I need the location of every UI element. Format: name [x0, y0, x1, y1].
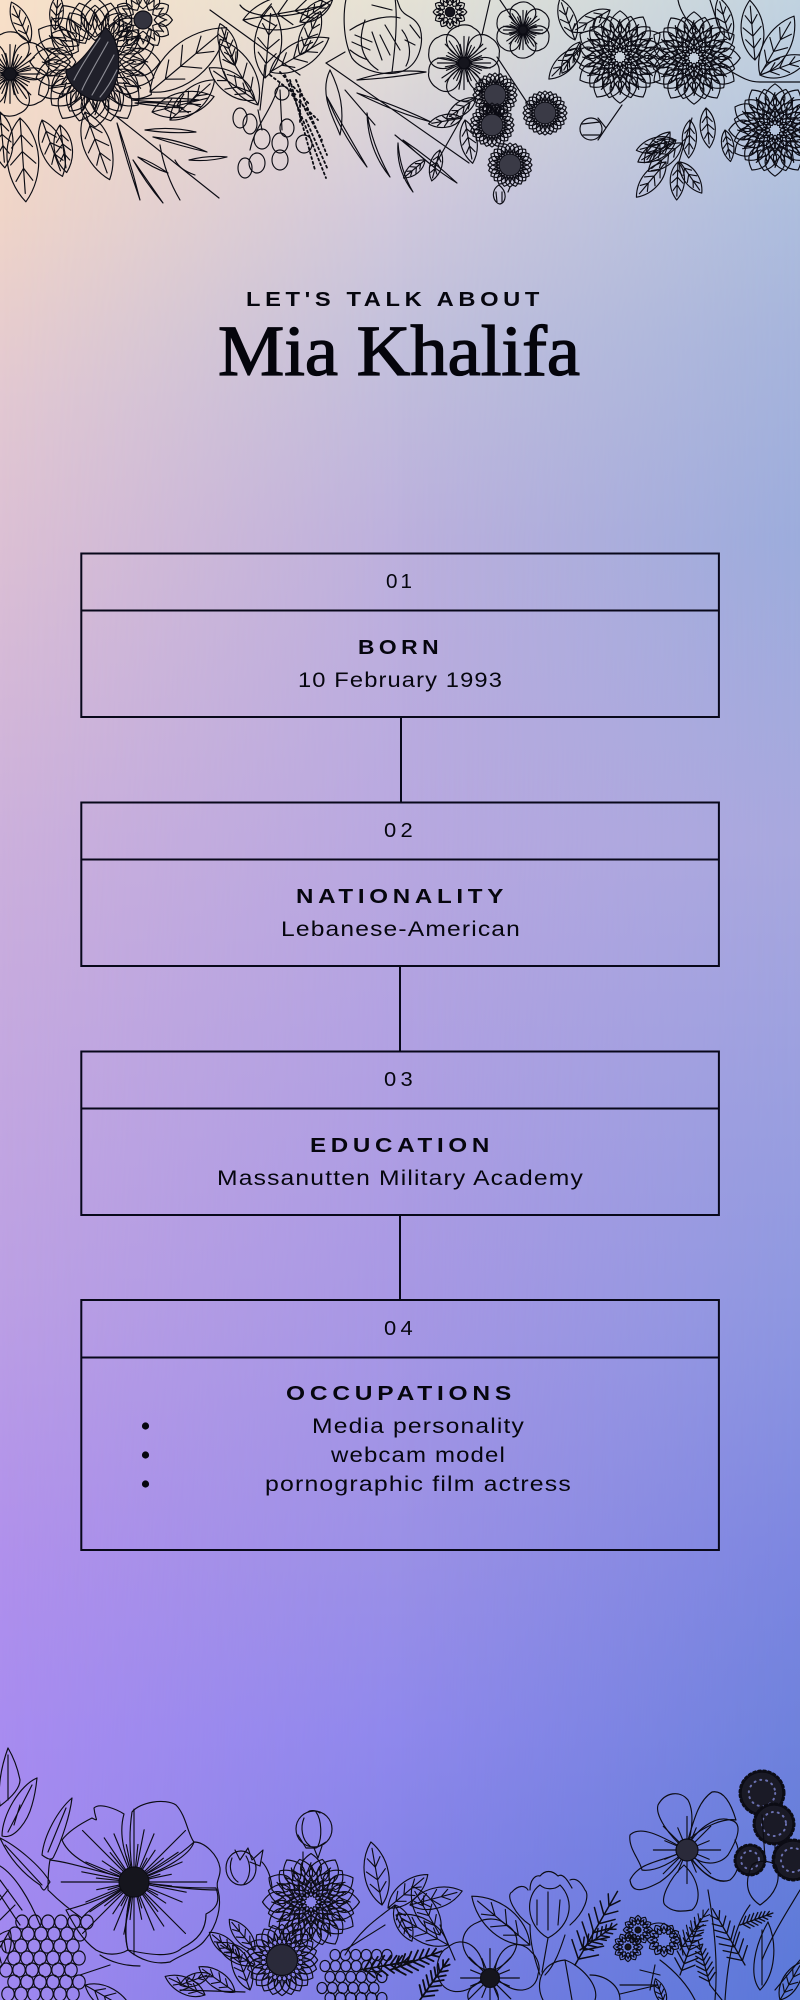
small sprig: fern right	[562, 1884, 631, 1973]
text: school: Massanutten Military Academy	[217, 1167, 584, 1190]
buds: middle	[226, 1811, 332, 1890]
flower: dahlia	[257, 1848, 365, 1956]
number 01: 01	[386, 570, 415, 593]
leaves and buds: far left	[0, 1748, 72, 1925]
title: Mia Khalifa: Mia Khalifa	[218, 311, 580, 391]
flower: peony	[326, 0, 421, 74]
flower: protea	[20, 0, 170, 137]
dahlias	[569, 6, 800, 181]
flower: right anemone	[630, 1792, 739, 1911]
bottom floral border	[0, 1748, 800, 2000]
leaves: right	[543, 0, 800, 203]
top floral border	[0, 0, 800, 204]
list: occupations: pornographic film actress	[265, 1473, 572, 1496]
sprigs: long leaves centre	[326, 63, 469, 192]
leaves: lower left	[0, 0, 122, 203]
stems and leaves centre-right	[427, 0, 530, 167]
number 03: 03	[384, 1068, 417, 1091]
list: occupations: Media personality	[312, 1415, 525, 1438]
seed balls: right	[735, 1771, 800, 1880]
small sunflowers	[465, 68, 572, 204]
connector 3	[399, 1215, 401, 1300]
blossoms: small cluster	[613, 1904, 716, 1990]
flower: small top daisy	[114, 0, 172, 49]
flower: sunflower	[238, 1916, 326, 2000]
panel: education	[81, 1052, 719, 1215]
text: nationality value: Lebanese-American	[281, 918, 521, 941]
flower: large poppy	[48, 1801, 220, 1966]
stems and bud: right	[650, 1861, 800, 2000]
number 02: 02	[384, 819, 417, 842]
flower: white anemone	[422, 25, 506, 101]
leaves: upper middle	[138, 0, 337, 150]
heading: let's talk about: LET'S TALK ABOUT	[246, 288, 544, 311]
berries and fern: centre	[317, 1942, 456, 2000]
flower: lower anemone	[430, 1919, 545, 2000]
panel: occupations	[81, 1300, 719, 1550]
panel: born	[81, 554, 719, 717]
flower: tiny top bloom	[433, 0, 467, 29]
heading: education: EDUCATION	[310, 1134, 494, 1157]
flower: tulip upper	[463, 1872, 587, 1975]
leaves: beneath dahlia	[162, 1915, 261, 2000]
leaves: centre sprays	[345, 1840, 465, 1960]
berry cluster: left	[0, 1915, 139, 2000]
flower: tulip lower	[539, 1960, 658, 2000]
connector 2	[399, 966, 401, 1051]
sprig: fern left	[117, 98, 227, 203]
flower: left anemone	[0, 32, 56, 116]
heading: born: BORN	[358, 636, 443, 659]
flower: small bloom upper	[492, 2, 554, 58]
text: birth date: 10 February 1993	[298, 669, 503, 692]
list: occupations	[142, 1415, 572, 1496]
connector 1	[400, 717, 402, 802]
heading: nationality: NATIONALITY	[296, 885, 508, 908]
bud	[580, 105, 622, 140]
heading: occupations: OCCUPATIONS	[286, 1382, 516, 1405]
number 04: 04	[384, 1317, 417, 1340]
berries and grain	[233, 65, 328, 178]
list: occupations: webcam model	[330, 1444, 506, 1467]
panel: nationality	[81, 802, 719, 966]
